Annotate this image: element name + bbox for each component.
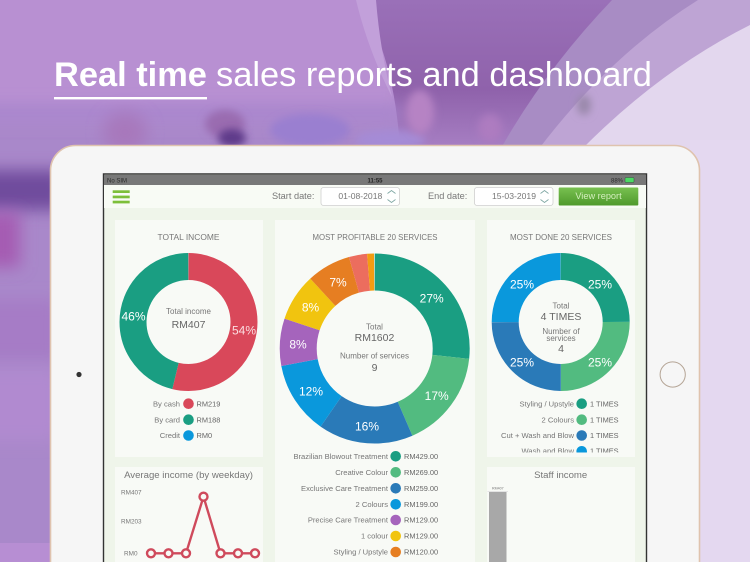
legend: By card — [154, 416, 180, 424]
end date field: End date: — [428, 191, 467, 201]
legend: Styling / Upstyle — [334, 548, 388, 556]
legend: 1 TIMES — [590, 400, 619, 408]
view report button: View report — [575, 191, 622, 201]
legend: Precise Care Treatment — [308, 516, 389, 524]
donut labels: 25% — [510, 356, 534, 370]
legend — [501, 398, 619, 457]
start date field: 01-08-2018 — [338, 191, 382, 201]
donut labels: 27% — [420, 292, 444, 306]
donut labels: 54% — [232, 324, 256, 338]
title: Real time — [54, 56, 207, 94]
legend — [153, 398, 220, 441]
legend: RM129.00 — [404, 532, 438, 540]
legend — [293, 451, 438, 557]
legend: RM120.00 — [404, 548, 438, 556]
line chart — [147, 493, 259, 557]
legend: RM129.00 — [404, 516, 438, 524]
donut labels: 7% — [329, 276, 347, 290]
donut labels: 25% — [588, 356, 612, 370]
axis labels: RM203 — [121, 518, 142, 526]
donut labels: Total income — [166, 307, 212, 316]
title: sales reports and dashboard — [216, 56, 652, 94]
icon: hamburger menu — [113, 190, 130, 203]
donut labels: 16% — [355, 420, 379, 434]
start date field — [272, 188, 400, 206]
donut labels: 8% — [302, 300, 320, 314]
donut labels: 4 TIMES — [541, 311, 581, 323]
axis labels: RM407 — [121, 490, 142, 496]
heading: MOST DONE 20 SERVICES — [510, 232, 612, 242]
legend: RM0 — [196, 431, 212, 440]
heading: Average income (by weekday) — [124, 470, 253, 481]
donut labels: 17% — [425, 389, 449, 403]
donut labels: services — [546, 334, 576, 343]
legend: RM259.00 — [404, 484, 438, 493]
legend: RM188 — [196, 416, 220, 424]
heading: MOST PROFITABLE 20 SERVICES — [312, 232, 438, 242]
donut labels: RM1602 — [355, 332, 394, 344]
heading: Staff income — [534, 470, 587, 481]
donut labels: Total — [553, 302, 570, 310]
axis labels — [121, 490, 142, 558]
legend: By cash — [153, 400, 180, 408]
donut labels — [289, 276, 449, 434]
top toolbar — [104, 185, 646, 208]
bar chart: RM407 — [492, 486, 504, 490]
heading: TOTAL INCOME — [158, 232, 220, 242]
start date field: Start date: — [272, 191, 314, 201]
panel: total income — [115, 220, 263, 457]
status bar: 88% — [611, 178, 624, 184]
legend: 1 TIMES — [590, 446, 619, 456]
donut labels: 4 — [558, 343, 564, 355]
donut labels — [121, 307, 256, 338]
view report button — [559, 188, 638, 206]
camera — [76, 372, 82, 377]
donut labels: RM407 — [172, 319, 206, 331]
donut chart: most done services — [505, 266, 616, 378]
donut labels: 8% — [289, 338, 307, 352]
legend: Wash and Blow — [522, 446, 575, 456]
legend: Styling / Upstyle — [520, 400, 574, 408]
legend: 1 TIMES — [590, 431, 619, 440]
status bar: No SIM — [107, 178, 127, 184]
axis labels: RM0 — [124, 550, 138, 558]
donut labels: Number of services — [340, 352, 409, 360]
legend: 2 Colours — [356, 500, 388, 509]
legend: 1 colour — [361, 532, 388, 540]
decorative curves — [500, 0, 750, 562]
legend: Exclusive Care Treatment — [301, 484, 389, 493]
legend: RM429.00 — [404, 452, 438, 461]
donut labels: 12% — [299, 384, 323, 398]
end date field — [428, 188, 553, 206]
status bar: 11:55 — [367, 178, 383, 184]
donut labels: 25% — [588, 278, 612, 292]
legend: RM219 — [196, 400, 220, 408]
donut labels: 9 — [372, 362, 378, 374]
status bar — [104, 175, 646, 185]
legend: Brazilian Blowout Treatment — [293, 452, 389, 461]
legend: Cut + Wash and Blow — [501, 431, 575, 440]
home button — [660, 362, 685, 387]
donut labels: Number of — [542, 327, 580, 336]
legend: 1 TIMES — [590, 416, 619, 424]
legend: Creative Colour — [335, 468, 388, 477]
panel: staff income bar chart — [487, 467, 635, 562]
donut labels: Total — [366, 322, 383, 332]
panel: average income line chart — [115, 467, 263, 562]
donut labels: 25% — [510, 278, 534, 292]
end date field: 15-03-2019 — [492, 191, 536, 201]
donut chart: profitable services — [298, 272, 451, 425]
tablet screen — [104, 174, 646, 562]
legend: 2 Colours — [542, 416, 574, 424]
tablet body — [50, 146, 700, 562]
donut chart: total income — [133, 266, 244, 378]
legend: Credit — [160, 431, 181, 440]
panel: most profitable services — [275, 220, 475, 562]
bar chart — [488, 486, 508, 562]
legend: RM269.00 — [404, 468, 438, 477]
donut labels — [510, 278, 612, 370]
donut labels: 46% — [121, 310, 146, 324]
title — [54, 56, 652, 99]
panel: most done services — [487, 220, 635, 457]
legend: RM199.00 — [404, 500, 438, 509]
